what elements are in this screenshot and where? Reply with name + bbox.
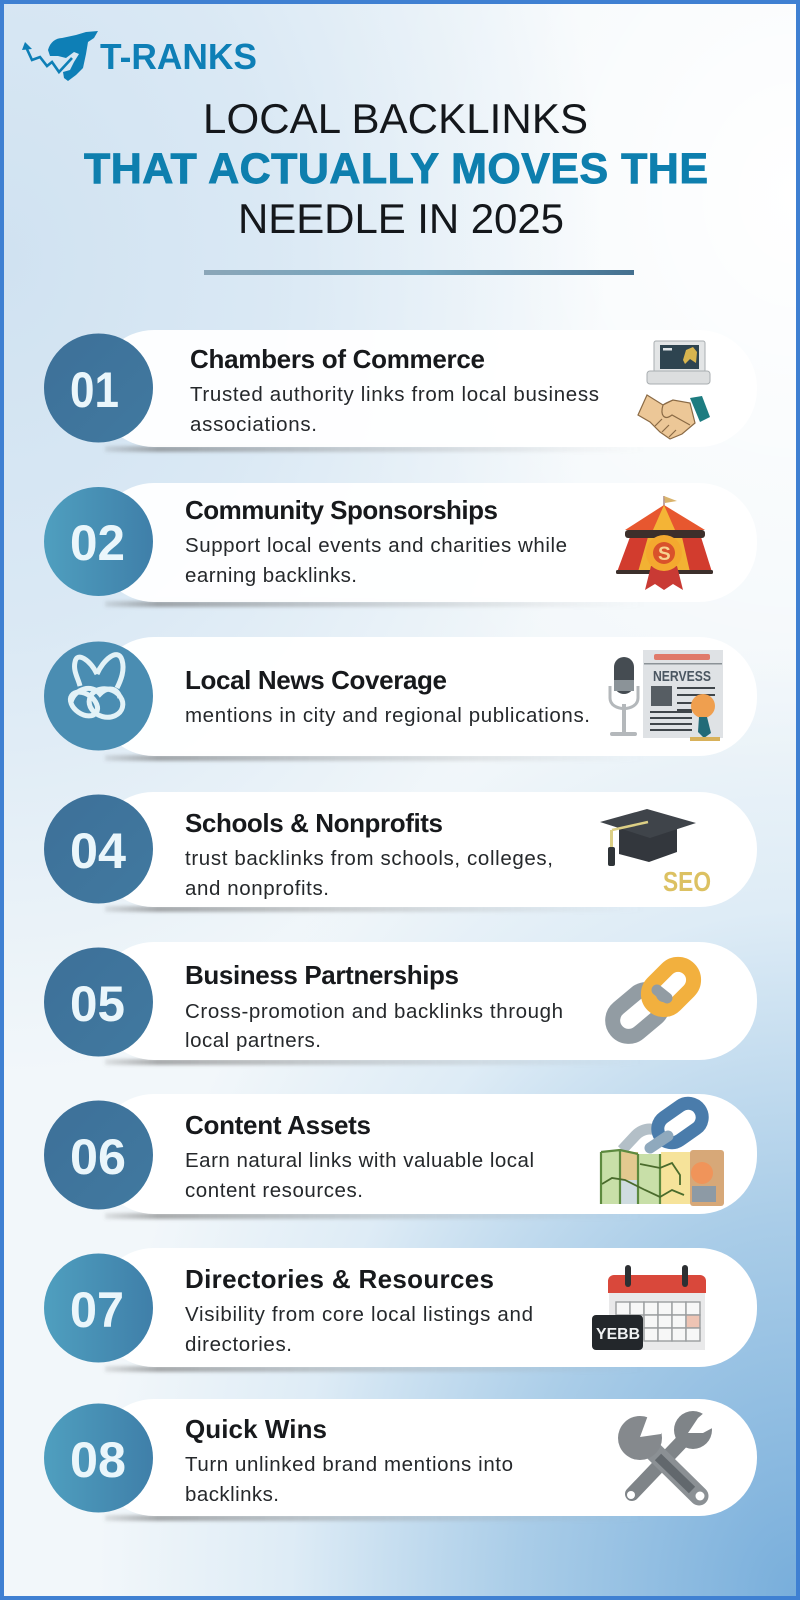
icon: microphone and newspaper: NERVESS (653, 668, 711, 685)
title divider (204, 270, 634, 275)
title line 1: LOCAL BACKLINKS (203, 95, 588, 142)
icon: map with chain link (601, 1098, 724, 1206)
icon: microphone and newspaper (610, 650, 723, 741)
panel: 01 Chambers of Commerce (44, 330, 757, 452)
badge 07 (44, 1254, 153, 1362)
icon: laptop and handshake (638, 341, 710, 439)
description 01 (190, 383, 599, 436)
description 04 (185, 847, 553, 900)
description 08: Turn unlinked brand mentions into (185, 1453, 513, 1476)
badge 02: 02 (70, 515, 125, 571)
heading 06: Content Assets (185, 1110, 371, 1140)
badge 01 (44, 334, 153, 442)
description 08 (185, 1453, 513, 1506)
heading 01: Chambers of Commerce (190, 344, 485, 374)
heading 05: Business Partnerships (185, 960, 459, 990)
description 07 (185, 1303, 533, 1356)
badge 08 (44, 1404, 153, 1512)
badge 01: 01 (70, 362, 119, 418)
panel: 02 Community Sponsorships (44, 483, 757, 607)
panel: 08 Quick Wins (44, 1399, 757, 1521)
description 04: and nonprofits. (185, 877, 329, 900)
description 05: Cross-promotion and backlinks through (185, 1000, 563, 1023)
heading 03: Local News Coverage (185, 665, 447, 695)
badge 08: 08 (70, 1432, 126, 1488)
badge 02 (44, 487, 153, 596)
heading 07: Directories & Resources (185, 1264, 494, 1294)
icon: circus tent with medal: S (658, 544, 671, 565)
description 03: mentions in city and regional publications. (185, 704, 590, 727)
panel: 06 Content Assets (44, 1094, 757, 1219)
description 07: directories. (185, 1333, 292, 1356)
badge 05: 05 (70, 976, 125, 1032)
description 08: backlinks. (185, 1483, 279, 1506)
heading 08: Quick Wins (185, 1414, 327, 1444)
description 06 (185, 1149, 534, 1202)
title line 2: THAT ACTUALLY MOVES THE (84, 145, 708, 193)
heading 02: Community Sponsorships (185, 495, 498, 525)
panel: 05 Business Partnerships (44, 942, 757, 1065)
panel: 04 Schools & Nonprofits (44, 792, 757, 912)
badge 06: 06 (70, 1129, 126, 1185)
panel: 03 Local News Coverage (44, 637, 757, 761)
icon: chain link (606, 958, 700, 1043)
icon: crossed wrenches (618, 1406, 716, 1500)
description 05: local partners. (185, 1029, 321, 1052)
description 07: Visibility from core local listings and (185, 1303, 533, 1326)
icon: dinosaur head with rising arrow (22, 31, 98, 81)
icon: calendar with YEBB label: YEBB (596, 1326, 640, 1343)
icon: graduation cap with SEO (600, 809, 711, 897)
description 01: associations. (190, 413, 317, 436)
logo wordmark: T-RANKS (100, 36, 257, 77)
description 01: Trusted authority links from local business (190, 383, 599, 406)
logo: T-RANKS (22, 31, 257, 81)
badge 04 (44, 794, 153, 904)
panel: 07 Directories & Resources (44, 1248, 757, 1372)
icon: calendar with YEBB label (592, 1265, 706, 1350)
heading 04: Schools & Nonprofits (185, 808, 443, 838)
icon: graduation cap with SEO: SEO (663, 866, 711, 897)
badge 06 (44, 1100, 153, 1210)
description 02 (185, 534, 567, 587)
badge 03 with looped glyph (44, 642, 153, 750)
icon: circus tent with medal (616, 496, 713, 590)
description 06: Earn natural links with valuable local (185, 1149, 534, 1172)
description 02: earning backlinks. (185, 564, 357, 587)
badge 05 (44, 948, 153, 1056)
description 04: trust backlinks from schools, colleges, (185, 847, 553, 870)
description 06: content resources. (185, 1179, 363, 1202)
title (84, 95, 708, 242)
description 02: Support local events and charities while (185, 534, 567, 557)
description 05 (185, 1000, 563, 1052)
badge 07: 07 (70, 1282, 124, 1338)
title line 3: NEEDLE IN 2025 (238, 195, 564, 242)
badge 04: 04 (70, 823, 126, 879)
